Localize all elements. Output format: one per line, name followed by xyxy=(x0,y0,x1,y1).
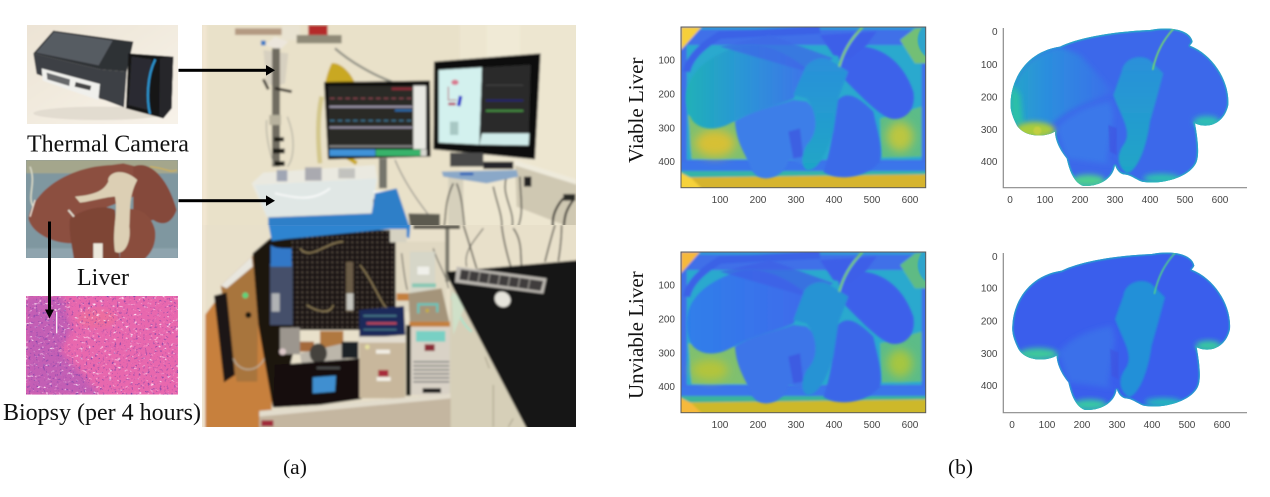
y axis tick labels: 400 xyxy=(658,382,675,393)
arrow: camera to mount xyxy=(178,65,275,76)
y axis tick labels: 100 xyxy=(981,284,998,295)
axes frame xyxy=(681,27,926,188)
x axis tick labels: 400 xyxy=(1144,420,1161,431)
arrow: liver to biopsy xyxy=(45,222,54,318)
x axis tick labels: 500 xyxy=(864,195,881,206)
y axis tick labels xyxy=(981,27,998,168)
x axis tick labels: 300 xyxy=(1109,420,1126,431)
label: Liver: Liver xyxy=(77,265,129,291)
x axis tick labels: 600 xyxy=(1212,195,1229,206)
photo: thermal camera xyxy=(27,25,178,124)
caption (b): (b) xyxy=(948,455,973,479)
y axis tick labels: 100 xyxy=(658,280,675,292)
y axis tick labels: 400 xyxy=(658,157,675,168)
y axis tick labels: 300 xyxy=(658,348,675,360)
photo: biopsy histology slide xyxy=(26,296,178,395)
y axis tick labels: 400 xyxy=(981,157,998,168)
heatmap: viable liver with background xyxy=(658,26,926,203)
y axis tick labels: 300 xyxy=(981,349,998,360)
x axis tick labels: 400 xyxy=(826,195,843,206)
x axis tick labels: 100 xyxy=(712,420,729,431)
x axis tick labels: 100 xyxy=(712,195,729,206)
scatter plot: viable liver segmented xyxy=(981,27,1247,206)
y axis tick labels: 0 xyxy=(992,27,998,38)
photo: liver specimen xyxy=(23,158,180,260)
x axis tick labels: 400 xyxy=(1142,195,1159,206)
label: Biopsy (per 4 hours): Biopsy (per 4 hours) xyxy=(3,400,201,426)
x axis tick labels: 400 xyxy=(826,420,843,431)
scatter plot: unviable liver segmented xyxy=(981,252,1247,431)
panel (b): thermal image plots xyxy=(624,19,1247,479)
arrow: liver to tray xyxy=(178,195,275,206)
label: Thermal Camera: Thermal Camera xyxy=(27,132,189,158)
y axis tick labels: 200 xyxy=(658,90,675,100)
y axis tick labels xyxy=(658,56,675,168)
panel (a): perfusion experiment setup xyxy=(3,22,580,479)
x axis tick labels: 600 xyxy=(902,420,919,431)
y axis tick labels: 300 xyxy=(658,124,675,134)
y axis tick labels: 100 xyxy=(658,56,675,66)
y axis tick labels: 200 xyxy=(981,92,998,104)
axes lines xyxy=(1003,28,1247,188)
y axis tick labels: 400 xyxy=(981,381,998,392)
y axis tick labels: 300 xyxy=(981,125,998,136)
x axis tick labels xyxy=(1009,420,1231,431)
y axis tick labels: 200 xyxy=(981,317,998,328)
caption (a): (a) xyxy=(283,455,307,479)
x axis tick labels: 500 xyxy=(864,420,881,431)
x axis tick labels: 200 xyxy=(1074,420,1091,431)
y axis tick labels: 200 xyxy=(658,314,675,326)
x axis tick labels xyxy=(712,420,919,431)
x axis tick labels: 200 xyxy=(1072,195,1089,206)
y axis tick labels xyxy=(981,252,998,392)
x axis tick labels: 100 xyxy=(1037,195,1054,206)
x axis tick labels: 200 xyxy=(750,195,767,206)
photo: perfusion machine setup, upper half xyxy=(200,23,580,233)
row label: Viable Liver: Viable Liver xyxy=(624,58,648,163)
x axis tick labels xyxy=(1007,195,1229,206)
y axis tick labels: 100 xyxy=(981,60,998,71)
y axis tick labels: 0 xyxy=(992,252,998,263)
axes frame xyxy=(681,252,926,413)
x axis tick labels: 200 xyxy=(750,420,767,431)
x axis tick labels: 0 xyxy=(1007,195,1013,206)
x axis tick labels: 600 xyxy=(902,195,919,206)
x axis tick labels: 300 xyxy=(1107,195,1124,206)
x axis tick labels: 300 xyxy=(788,420,805,431)
x axis tick labels: 300 xyxy=(788,195,805,206)
row label: Unviable Liver: Unviable Liver xyxy=(624,271,648,399)
x axis tick labels: 500 xyxy=(1177,195,1194,206)
x axis tick labels: 600 xyxy=(1214,420,1231,431)
axes lines xyxy=(1003,253,1247,413)
heatmap: unviable liver with background xyxy=(658,252,926,428)
x axis tick labels: 100 xyxy=(1039,420,1056,431)
x axis tick labels xyxy=(712,195,919,206)
x axis tick labels: 0 xyxy=(1009,420,1015,431)
x axis tick labels: 500 xyxy=(1179,420,1196,431)
photo: perfusion machine setup, lower half xyxy=(200,218,580,432)
y axis tick labels xyxy=(658,280,675,393)
